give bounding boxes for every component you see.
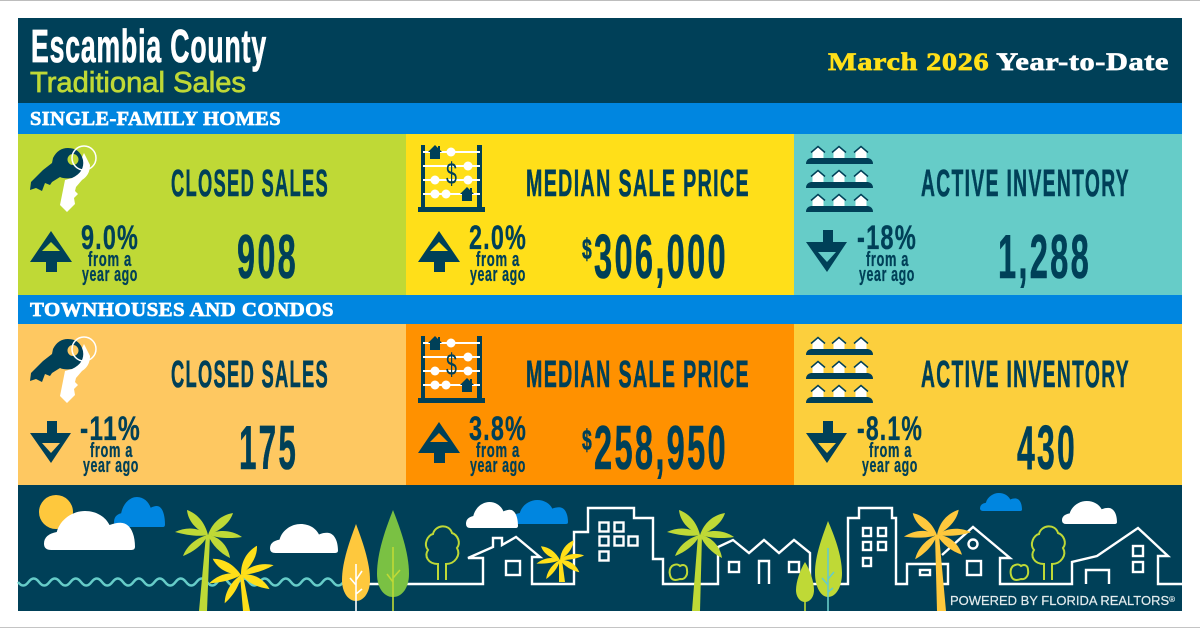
icon: keys [30,146,96,212]
change from a year ago [857,410,923,477]
building outlines [368,508,1182,584]
change from a year ago: year ago [470,455,526,477]
icon: white cloud [270,524,338,553]
change from a year ago: from a [90,440,133,462]
metric heading: MEDIAN SALE PRICE [526,354,750,396]
panel: townhouse active inventory [794,324,1182,485]
value: 430 [1017,414,1077,483]
title: Escambia County: Escambia County [31,20,267,72]
value: 1,288 [998,223,1091,292]
icon: bush [670,564,687,580]
icon: abacus [418,336,485,403]
value: 306,000 [594,223,728,292]
icon: sun [39,495,73,529]
icon: outline tree [426,526,459,580]
change from a year ago [469,219,527,286]
credit: powered by Florida Realtors: POWERED BY FLORIDA REALTORS [950,593,1170,608]
building windows and doors [506,522,1143,584]
panel: single-family median sale price [406,134,794,295]
value [582,223,728,292]
change from a year ago: from a [88,249,132,271]
icon: blue cloud [114,497,165,527]
icon: yellow tree [342,524,370,611]
icon: orange palm [901,506,974,611]
value: 908 [237,223,298,292]
change from a year ago: year ago [82,264,138,286]
icon: keys [30,337,96,403]
change from a year ago [80,410,141,477]
icon: white cloud [466,502,518,528]
change from a year ago: -8.1% [857,410,923,448]
panel: townhouse median sale price [406,324,794,485]
icon: houses on shelves [806,338,873,403]
header band [18,18,1182,103]
icon: green tree [377,510,409,611]
change from a year ago: from a [476,249,520,271]
panel: townhouse closed sales: CLOSED SALES [171,354,329,396]
arrow up [418,422,460,463]
value: $ [582,234,593,266]
change from a year ago: 3.8% [469,410,527,448]
icon: lime tree [815,521,842,611]
icon: small lime tree [796,562,814,611]
section band: single-family homes: SINGLE-FAMILY HOMES [30,108,281,130]
change from a year ago [469,410,527,477]
value: 258,950 [594,414,728,483]
page bottom rule [0,627,1200,628]
arrow down [30,421,71,463]
change from a year ago: from a [869,440,912,462]
icon: abacus [418,145,485,212]
icon: blue cloud [980,493,1022,511]
page top rule [0,0,1200,1]
illustration: coastal town skyline [18,485,1182,611]
change from a year ago: 9.0% [81,219,139,257]
arrow down [806,230,847,272]
icon: lime palm [175,510,242,611]
change from a year ago: -18% [857,219,917,257]
icon: yellow palm [201,540,281,611]
change from a year ago [81,219,139,286]
section band: single-family homes [18,103,1182,134]
change from a year ago: year ago [470,264,526,286]
icon: white cloud [44,511,135,550]
panel: single-family closed sales [18,134,406,295]
credit: powered by Florida Realtors: ® [1169,595,1175,604]
value [582,414,728,483]
date heading: March 2026 Year-to-Date [828,49,1169,76]
icon: outline tree [1032,526,1065,580]
icon: white cloud [1062,501,1117,524]
section band: townhouses and condos: TOWNHOUSES AND CONDOS [30,299,334,321]
panel: single-family closed sales: CLOSED SALES [171,163,329,205]
icon: small yellow palm [533,537,588,582]
change from a year ago: from a [866,249,909,271]
section band: townhouses and condos [18,295,1182,324]
icon: bush [1011,564,1028,580]
change from a year ago: year ago [862,455,918,477]
change from a year ago: -11% [80,410,141,448]
arrow up [418,231,460,272]
panel: townhouse closed sales [18,324,406,485]
change from a year ago: from a [476,440,520,462]
icon: houses on shelves [806,146,873,212]
icon: blue cloud [512,500,568,524]
change from a year ago: year ago [859,264,915,286]
change from a year ago: 2.0% [469,219,527,257]
water wave [18,578,344,586]
value: $ [582,425,593,457]
icon: lime palm [667,510,734,611]
arrow down [806,421,847,463]
change from a year ago: year ago [83,455,139,477]
panel: single-family active inventory [794,134,1182,295]
value: 175 [239,414,298,483]
arrow up [30,231,72,272]
change from a year ago [857,219,917,286]
metric heading: MEDIAN SALE PRICE [526,163,750,205]
subtitle: Traditional Sales: Traditional Sales [30,67,246,99]
